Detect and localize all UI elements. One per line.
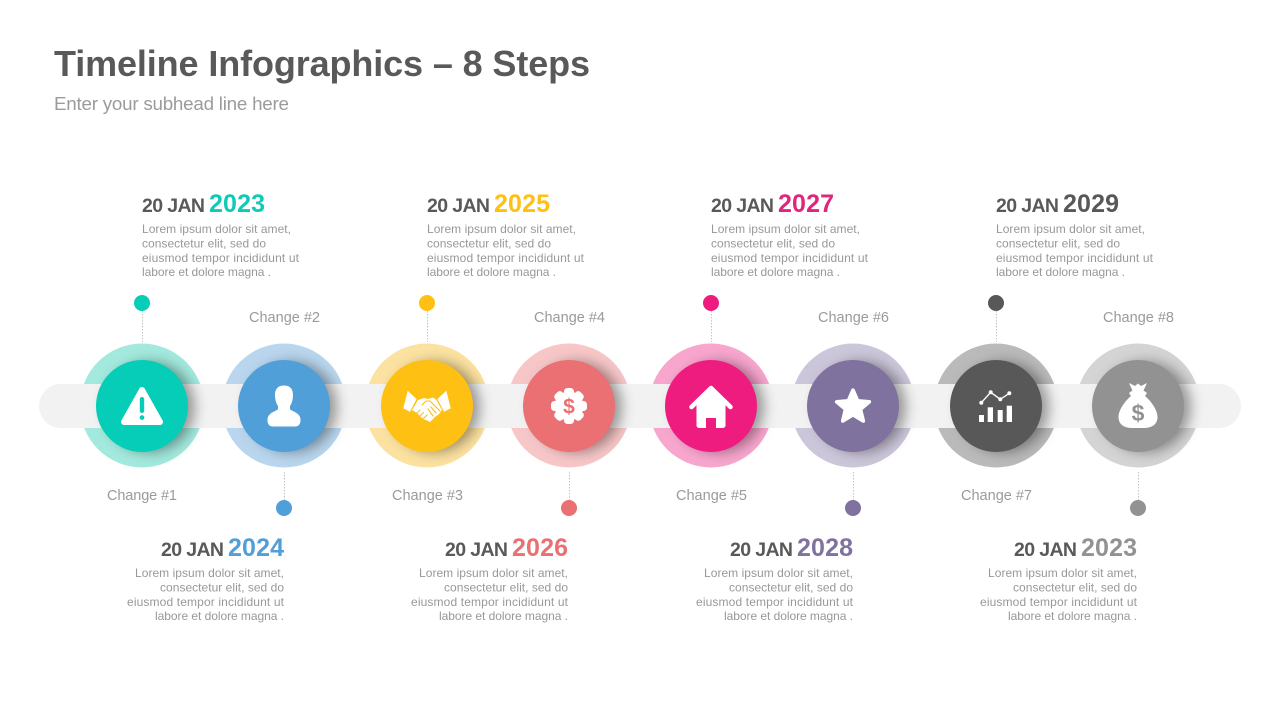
- text block: 2023 bottom: eiusmod tempor incididunt ut: [980, 595, 1138, 609]
- step 6 node: star icon: [807, 360, 906, 452]
- ring: step 4: [507, 344, 631, 468]
- icon: star: [837, 390, 869, 421]
- label: Change #6: Change #6: [818, 310, 889, 326]
- text block: 2024 bottom: consectetur elit, sed do: [160, 580, 284, 594]
- text block: 2023 bottom: Lorem ipsum dolor sit amet,: [988, 566, 1137, 580]
- text block: 2028 bottom: Lorem ipsum dolor sit amet,: [704, 566, 853, 580]
- text block: 2024 bottom: [127, 534, 285, 623]
- ring: step 7: [934, 344, 1058, 468]
- step 4 node: gear dollar icon: [523, 360, 622, 452]
- step 2 node: person icon: [238, 360, 337, 452]
- connector and dot: step 4: [561, 472, 577, 516]
- text block: 2023 top: labore et dolore magna .: [142, 265, 271, 279]
- step 8 node: money bag icon: [1092, 360, 1191, 452]
- ring: step 3: [365, 344, 489, 468]
- text block: 2026 bottom: 20 JAN: [445, 539, 508, 561]
- label: Change #8: Change #8: [1103, 310, 1174, 326]
- text block: 2027 top: 20 JAN: [711, 195, 774, 217]
- step 3 node: handshake icon: [381, 360, 480, 452]
- text block: 2027 top: [711, 190, 869, 279]
- timeline bar: [39, 384, 1241, 428]
- label: Change #3: Change #3: [392, 488, 463, 504]
- icon: warning triangle: [124, 390, 160, 422]
- label: Change #7: Change #7: [961, 488, 1032, 504]
- icon: gear with dollar: $: [563, 396, 575, 418]
- text block: 2023 top: consectetur elit, sed do: [142, 236, 266, 250]
- text block: 2028 bottom: 20 JAN: [730, 539, 793, 561]
- text block: 2025 top: consectetur elit, sed do: [427, 236, 551, 250]
- text block: 2024 bottom: labore et dolore magna .: [155, 609, 284, 623]
- text block: 2029 top: 2029: [1063, 190, 1119, 218]
- connector and dot: step 7: [988, 295, 1004, 342]
- text block: 2025 top: eiusmod tempor incididunt ut: [427, 251, 585, 265]
- text block: 2025 top: 2025: [494, 190, 550, 218]
- text block: 2023 bottom: [980, 534, 1138, 623]
- connector and dot: step 5: [703, 295, 719, 342]
- text block: 2027 top: Lorem ipsum dolor sit amet,: [711, 222, 860, 236]
- text block: 2028 bottom: labore et dolore magna .: [724, 609, 853, 623]
- ring: step 1: [80, 344, 204, 468]
- step 1 node: warning icon: [96, 360, 195, 452]
- text block: 2023 top: 2023: [209, 190, 265, 218]
- text block: 2028 bottom: consectetur elit, sed do: [729, 580, 853, 594]
- text block: 2024 bottom: eiusmod tempor incididunt ut: [127, 595, 285, 609]
- icon: money bag: $: [1132, 400, 1145, 426]
- icon: house: [692, 388, 730, 428]
- step 7 node: chart icon: [950, 360, 1049, 452]
- label: Change #4: Change #4: [534, 310, 605, 326]
- text block: 2026 bottom: eiusmod tempor incididunt ut: [411, 595, 569, 609]
- subhead: Enter your subhead line here: [54, 93, 289, 114]
- connector and dot: step 8: [1130, 472, 1146, 516]
- text block: 2028 bottom: 2028: [797, 534, 853, 562]
- step 5 node: house icon: [665, 360, 764, 452]
- text block: 2023 bottom: labore et dolore magna .: [1008, 609, 1137, 623]
- text block: 2023 top: Lorem ipsum dolor sit amet,: [142, 222, 291, 236]
- label: Change #5: Change #5: [676, 488, 747, 504]
- connector and dot: step 2: [276, 472, 292, 516]
- text block: 2027 top: eiusmod tempor incididunt ut: [711, 251, 869, 265]
- text block: 2027 top: consectetur elit, sed do: [711, 236, 835, 250]
- text block: 2025 top: labore et dolore magna .: [427, 265, 556, 279]
- label: Change #1: Change #1: [107, 488, 177, 504]
- text block: 2029 top: [996, 190, 1154, 279]
- text block: 2026 bottom: 2026: [512, 534, 568, 562]
- title: Timeline Infographics – 8 Steps: [54, 43, 590, 84]
- text block: 2023 bottom: consectetur elit, sed do: [1013, 580, 1137, 594]
- text block: 2025 top: [427, 190, 585, 279]
- ring: step 5: [649, 344, 773, 468]
- text block: 2023 top: eiusmod tempor incididunt ut: [142, 251, 300, 265]
- text block: 2024 bottom: 20 JAN: [161, 539, 224, 561]
- icon: line and bar chart: [979, 390, 1012, 422]
- label: Change #2: Change #2: [249, 310, 320, 326]
- connector and dot: step 6: [845, 472, 861, 516]
- text block: 2023 top: [142, 190, 300, 279]
- connector and dot: step 3: [419, 295, 435, 342]
- text block: 2023 bottom: 2023: [1081, 534, 1137, 562]
- text block: 2029 top: labore et dolore magna .: [996, 265, 1125, 279]
- text block: 2027 top: 2027: [778, 190, 834, 218]
- ring: step 2: [222, 344, 346, 468]
- text block: 2023 top: 20 JAN: [142, 195, 205, 217]
- text block: 2028 bottom: eiusmod tempor incididunt ut: [696, 595, 854, 609]
- text block: 2029 top: 20 JAN: [996, 195, 1059, 217]
- text block: 2029 top: consectetur elit, sed do: [996, 236, 1120, 250]
- text block: 2025 top: 20 JAN: [427, 195, 490, 217]
- connector and dot: step 1: [134, 295, 150, 342]
- icon: handshake: [403, 391, 451, 422]
- ring: step 8: [1076, 344, 1200, 468]
- text block: 2026 bottom: [411, 534, 569, 623]
- text block: 2028 bottom: [696, 534, 854, 623]
- icon: person: [268, 386, 300, 426]
- text block: 2029 top: eiusmod tempor incididunt ut: [996, 251, 1154, 265]
- text block: 2026 bottom: consectetur elit, sed do: [444, 580, 568, 594]
- text block: 2029 top: Lorem ipsum dolor sit amet,: [996, 222, 1145, 236]
- text block: 2026 bottom: Lorem ipsum dolor sit amet,: [419, 566, 568, 580]
- text block: 2026 bottom: labore et dolore magna .: [439, 609, 568, 623]
- text block: 2027 top: labore et dolore magna .: [711, 265, 840, 279]
- ring: step 6: [791, 344, 915, 468]
- text block: 2025 top: Lorem ipsum dolor sit amet,: [427, 222, 576, 236]
- text block: 2024 bottom: Lorem ipsum dolor sit amet,: [135, 566, 284, 580]
- text block: 2023 bottom: 20 JAN: [1014, 539, 1077, 561]
- text block: 2024 bottom: 2024: [228, 534, 284, 562]
